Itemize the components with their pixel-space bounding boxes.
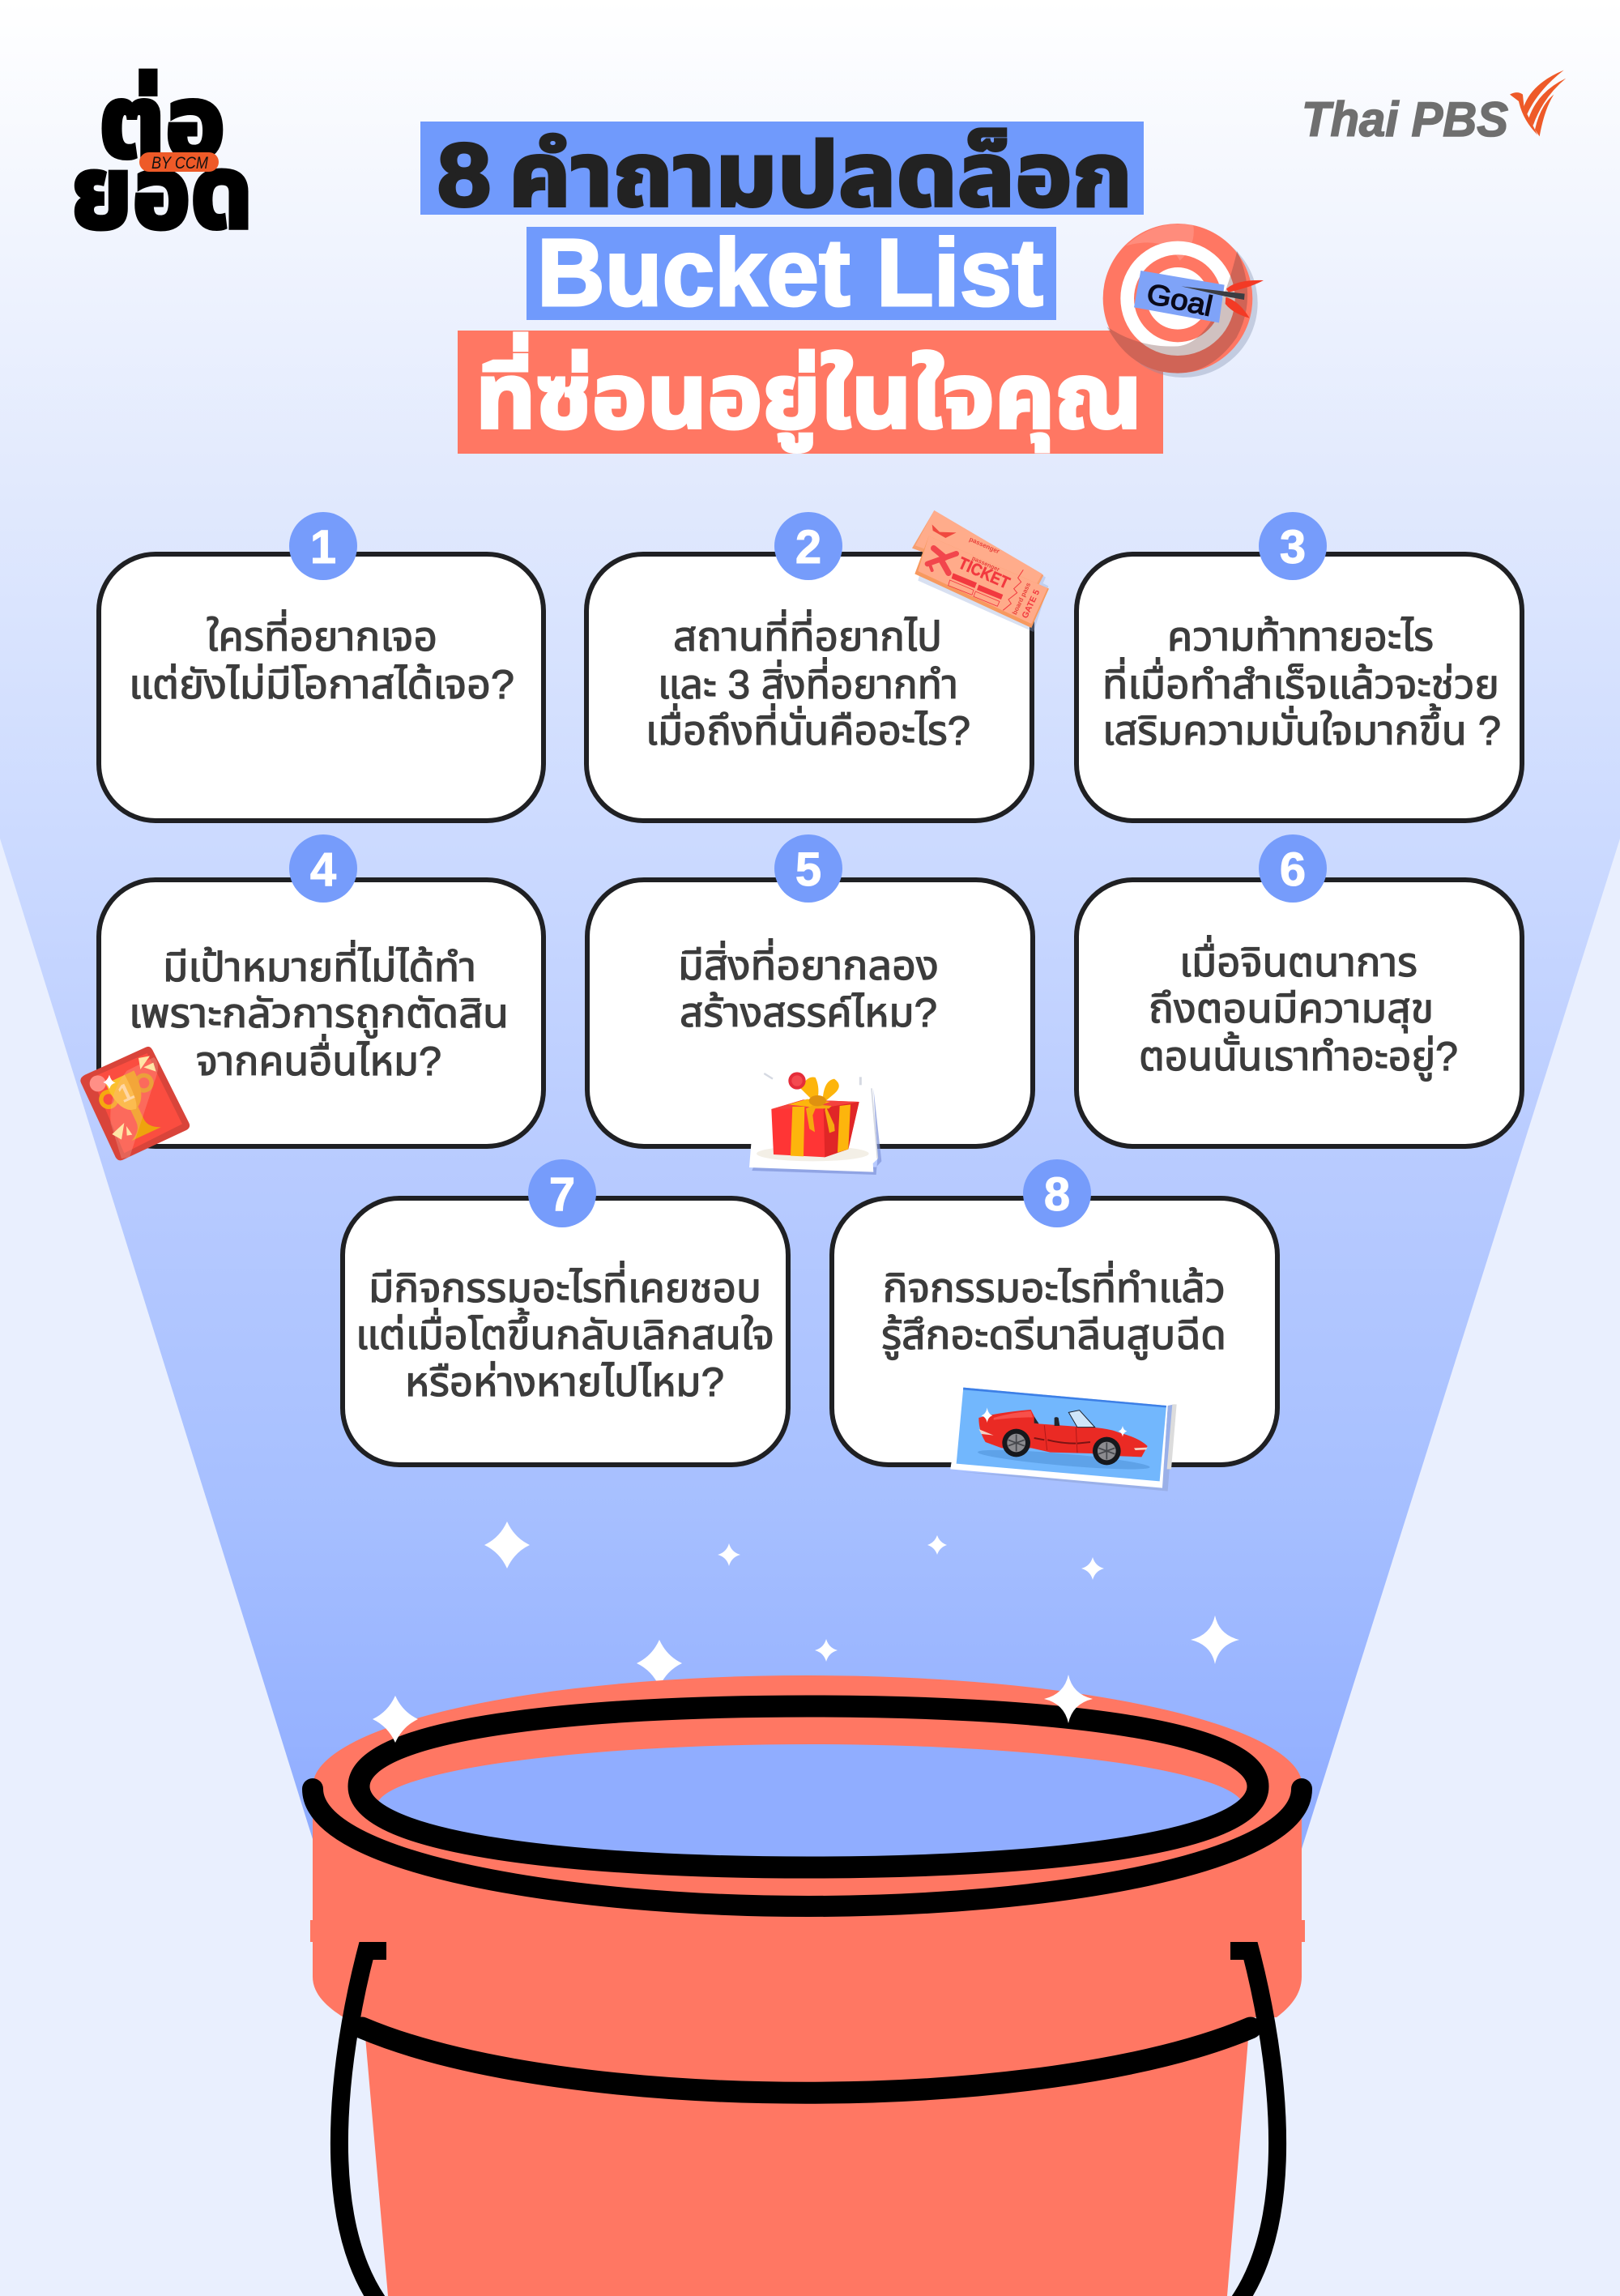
panel: question 2: และ 3 สิ่งที่อยากทำ (658, 657, 958, 707)
logo: Thai PBS (1302, 70, 1566, 147)
panel: question 4: 4 (310, 843, 336, 896)
icon: red car photo (950, 1387, 1177, 1492)
panel: question 6: ถึงตอนมีความสุข (1149, 986, 1434, 1033)
panel: question 3: ความท้าทายอะไร (1167, 614, 1434, 659)
bucket rim (313, 1675, 1302, 1897)
panel: question 5 (587, 834, 1033, 1146)
panel: question 6: ตอนนั้นเราทำอะอยู่? (1139, 1031, 1458, 1081)
icon: tickets: TICKET (956, 554, 1013, 593)
title line 1: 8 (437, 126, 491, 225)
panel: question 3: 3 (1280, 521, 1306, 574)
panel: question 8: รู้สึกอะดรีนาลีนสูบฉีด (881, 1312, 1226, 1359)
icon: trophy card: 1 (113, 1078, 138, 1108)
panel: question 7: หรือห่างหายไปไหม? (405, 1359, 724, 1405)
logo: ต่อยอด by CCM: BY CCM (151, 154, 208, 173)
panel: question 5: มีสิ่งที่อยากลอง (678, 938, 939, 988)
bucket lower body (363, 2009, 1251, 2296)
panel: question 4: เพราะกลัวการถูกตัดสิน (129, 991, 509, 1038)
panel: question 3: เสริมความมั่นใจมากขึ้น ? (1102, 703, 1501, 753)
panel: question 3: ที่เมื่อทำสำเร็จแล้วจะช่วย (1102, 657, 1499, 707)
logo: ต่อยอด by CCM: ต่อ (99, 66, 225, 179)
bucket left handle (339, 1951, 386, 2296)
logo: ต่อยอด by CCM (71, 66, 253, 250)
panel: question 8 (832, 1159, 1277, 1465)
icon: tickets: board pass (1011, 581, 1032, 616)
icon: tickets: passenger (968, 536, 1000, 555)
bucket right handle (1230, 1951, 1277, 2296)
bucket inner ring (359, 1706, 1258, 1867)
sparkles over bucket (373, 1675, 1093, 1743)
panel: question 5: สร้างสรรค์ไหม? (680, 990, 937, 1035)
panel: question 7 (343, 1159, 788, 1465)
panel: question 3 (1076, 512, 1522, 821)
bucket (310, 1675, 1305, 2296)
panel: question 1: 1 (310, 521, 336, 574)
panel: question 4: มีเป้าหมายที่ไม่ได้ทำ (163, 940, 476, 990)
panel: question 2: 2 (795, 521, 821, 574)
bucket lower band (362, 2028, 1251, 2093)
icon: tickets: passenger (971, 554, 1001, 573)
title line 1: คำถามปลดล็อก (509, 126, 1132, 225)
panel: question 1: ใครที่อยากเจอ (207, 609, 437, 659)
panel: question 7: แต่เมื่อโตขึ้นกลับเลิกสนใจ (356, 1308, 774, 1358)
icon: trophy card (80, 1047, 190, 1160)
icon: tickets (912, 510, 1049, 632)
sparkles (484, 1521, 1239, 1687)
panel: question 4: จากคนอื่นไหม? (196, 1034, 441, 1084)
panel: question 2: สถานที่ที่อยากไป (673, 609, 942, 659)
logo: Thai PBS: Thai PBS (1302, 92, 1508, 147)
title line 2: Bucket List (537, 220, 1043, 326)
icon: goal target with dart: Goal (1144, 278, 1215, 322)
panel: question 8: 8 (1044, 1168, 1070, 1221)
panel: question 7: 7 (549, 1168, 575, 1221)
bucket outer arc (313, 1789, 1302, 1906)
bucket opening (377, 1744, 1243, 1869)
panel: question 5: 5 (795, 843, 821, 896)
panel: question 1 (99, 512, 544, 821)
panel: question 2: เมื่อถึงที่นั่นคืออะไร? (646, 703, 970, 753)
panel: question 2 (586, 512, 1032, 821)
bucket tab (310, 1920, 1305, 1942)
panel: question 1: แต่ยังไม่มีโอกาสได้เจอ? (129, 662, 514, 707)
bucket upper body (313, 1786, 1302, 2017)
panel: question 6 (1076, 834, 1522, 1146)
logo: ต่อยอด by CCM: ยอด (71, 137, 253, 250)
panel: question 6: เมื่อจินตนาการ (1179, 935, 1418, 985)
title line 3: ที่ซ่อนอยู่ในใจคุณ (475, 333, 1142, 452)
panel: question 8: กิจกรรมอะไรที่ทำแล้ว (883, 1261, 1226, 1311)
panel: question 7: มีกิจกรรมอะไรที่เคยชอบ (369, 1261, 761, 1311)
icon: goal target with dart (1103, 224, 1264, 378)
icon: tickets: GATE 5 (1020, 588, 1042, 620)
panel: question 4 (99, 834, 544, 1146)
panel: question 6: 6 (1280, 843, 1306, 896)
icon: gift box (749, 1072, 881, 1175)
